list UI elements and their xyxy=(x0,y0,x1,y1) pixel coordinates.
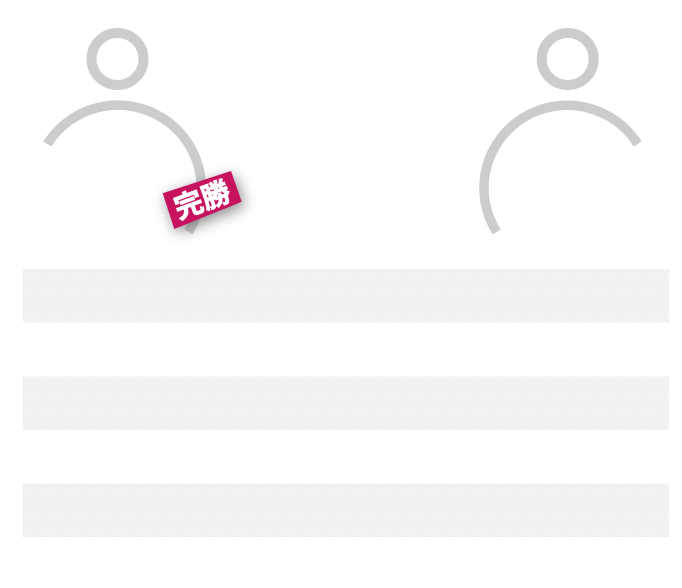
left person icon xyxy=(47,33,201,232)
row band 3 xyxy=(23,484,669,537)
badge text: 完勝 xyxy=(170,176,235,226)
row band 2 xyxy=(23,376,669,430)
row band 1 xyxy=(23,269,669,322)
right person icon xyxy=(484,33,638,232)
winner badge xyxy=(163,171,245,233)
